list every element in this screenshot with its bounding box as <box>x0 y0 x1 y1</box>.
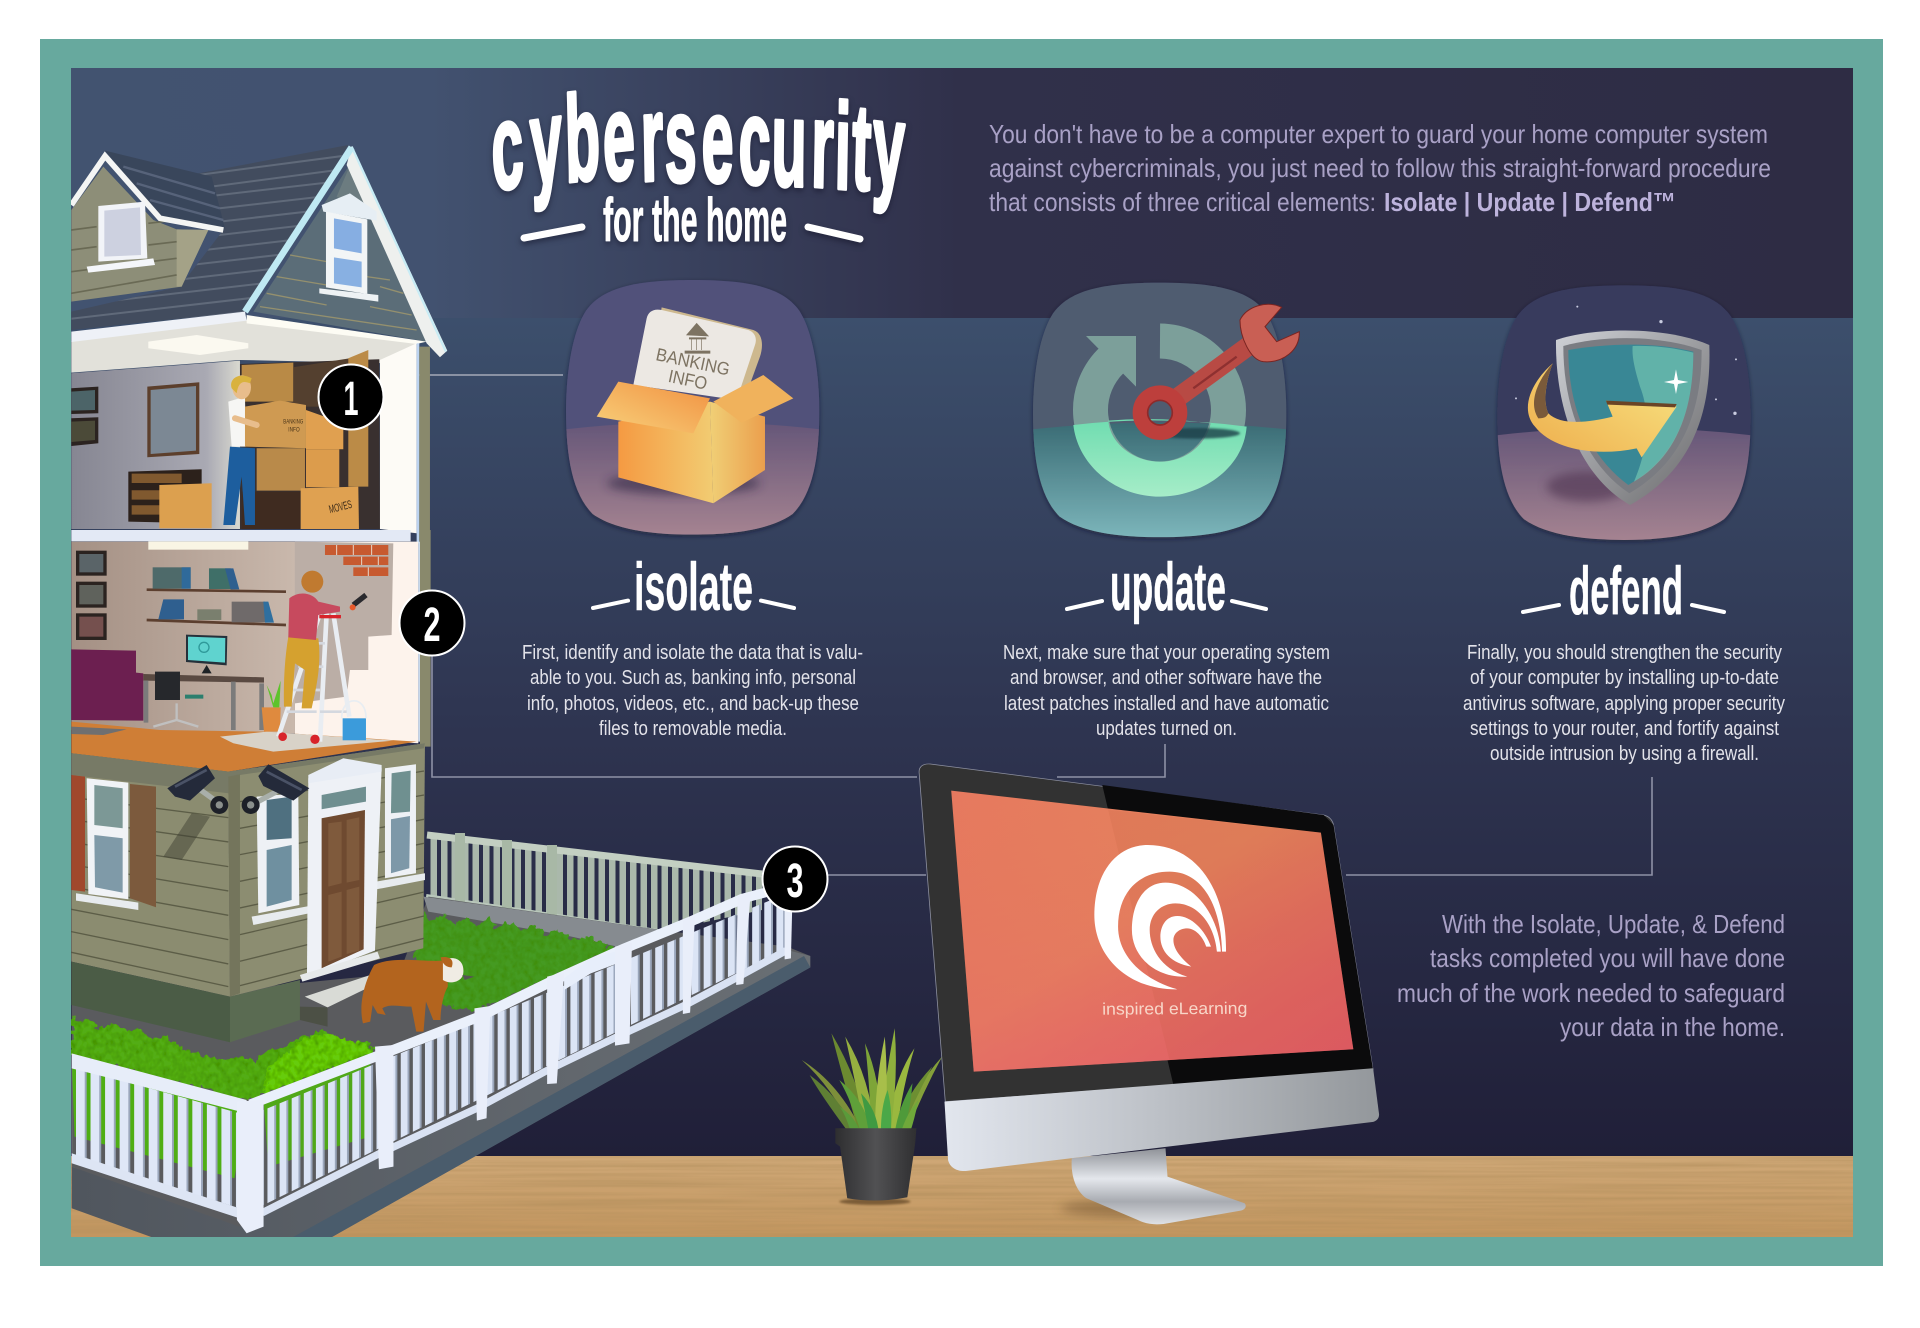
heading: defend <box>1569 553 1683 629</box>
description: Next, make sure that your operating system <box>1003 642 1330 664</box>
back fence <box>426 833 762 933</box>
potted plant <box>802 1028 942 1205</box>
description: outside intrusion by using a firewall. <box>1490 743 1759 765</box>
screen <box>951 791 1353 1072</box>
title: cybersecurity for the home: cybersecurity <box>489 69 906 218</box>
closing paragraph <box>1397 909 1785 1042</box>
description: settings to your router, and fortify against <box>1470 718 1779 740</box>
icon: banking info box <box>559 280 826 541</box>
box shadow <box>607 472 760 495</box>
description <box>1463 642 1785 765</box>
eaves and ceiling <box>71 312 427 373</box>
grass blades <box>802 1028 942 1133</box>
background: upper band <box>71 68 1853 318</box>
section: update <box>1003 549 1330 740</box>
iMac monitor <box>919 764 1379 1224</box>
description: antivirus software, applying proper security <box>1463 693 1785 715</box>
fence front left section <box>72 1053 247 1218</box>
intro paragraph: You don't have to be a computer expert to guard your home computer system <box>989 119 1768 149</box>
wrench shadow <box>1153 428 1240 439</box>
left lawn <box>72 1013 374 1100</box>
computer desk and chair <box>143 635 264 730</box>
upper floor: room one and roof <box>60 145 447 550</box>
stand <box>1061 1148 1246 1224</box>
fence right sections <box>251 887 787 1213</box>
step, dog and front fence <box>72 882 793 1233</box>
icon: update wrench <box>1026 283 1299 543</box>
dormer <box>71 151 225 302</box>
sofa <box>71 649 143 721</box>
frames and shelves <box>76 551 286 640</box>
description: info, photos, videos, etc., and back-up these <box>527 693 859 715</box>
wrench <box>1140 304 1299 433</box>
stars <box>1515 306 1737 415</box>
number badge 1: 1 <box>344 373 358 426</box>
ground floor windows and shutters <box>71 764 425 925</box>
exterior walls with siding <box>71 743 425 1042</box>
intro paragraph: Isolate | Update | Defend™ <box>1384 187 1676 217</box>
aluminium chin <box>944 1068 1379 1171</box>
number badge 3 <box>762 846 828 912</box>
wooden desk surface <box>71 1156 1853 1237</box>
interior right wall <box>380 343 430 550</box>
heading <box>593 549 794 625</box>
cardboard box <box>597 375 793 503</box>
description <box>522 642 863 740</box>
potted plant in room <box>262 681 281 732</box>
intro paragraph <box>989 119 1771 217</box>
description <box>1003 642 1330 740</box>
banking card <box>633 307 762 400</box>
front door <box>307 758 382 977</box>
badge background <box>1491 285 1757 546</box>
description: updates turned on. <box>1096 718 1237 740</box>
section: isolate <box>522 549 863 740</box>
closing paragraph: much of the work needed to safeguard <box>1397 978 1785 1008</box>
floor with drop cloth <box>71 722 417 772</box>
paint bucket <box>342 701 366 740</box>
gable end <box>245 146 447 357</box>
number badge 3: 3 <box>786 855 804 908</box>
wrap-around arrow <box>1528 363 1677 457</box>
yard slab and grass <box>72 897 810 1237</box>
heading: isolate <box>634 549 753 625</box>
shield shadow <box>1547 472 1627 502</box>
number badge 2: 2 <box>424 599 440 652</box>
description: files to removable media. <box>599 718 787 740</box>
right lawn <box>414 912 615 1011</box>
man carrying box: INFO <box>288 427 300 434</box>
plant pot <box>835 1128 916 1201</box>
heading <box>1067 549 1266 625</box>
number badge 1 <box>318 364 384 430</box>
refresh arrow ring <box>1073 336 1247 497</box>
description: latest patches installed and have automatic <box>1004 693 1329 715</box>
number badge 2 <box>400 590 464 656</box>
logo: inspired eLearning swirl <box>1094 845 1226 989</box>
banking card: BANKING <box>654 344 732 379</box>
description: of your computer by installing up-to-date <box>1470 667 1779 689</box>
closet with boxes <box>240 350 380 529</box>
security cameras <box>167 764 309 814</box>
heading: update <box>1110 549 1226 625</box>
room one walls <box>71 361 240 529</box>
closing paragraph: tasks completed you will have done <box>1430 943 1785 973</box>
icon: defend shield <box>1491 285 1757 546</box>
lower house: room two and exterior <box>71 530 431 1042</box>
badge background <box>559 280 826 541</box>
shield <box>1556 331 1710 505</box>
intro paragraph: that consists of three critical elements: <box>989 187 1376 217</box>
closet with boxes: MOVES <box>328 499 354 516</box>
intro paragraph: against cybercriminals, you just need to follow this straight-forward procedure <box>989 153 1771 183</box>
dog <box>361 957 474 1032</box>
title: cybersecurity for the home: for the home <box>603 186 787 254</box>
dark reflection on bezel <box>1102 785 1373 1085</box>
step and door sill <box>300 952 380 1027</box>
room two walls <box>71 530 431 747</box>
illustration: cutaway house with yard <box>60 145 810 1237</box>
bezel <box>919 764 1373 1102</box>
man carrying box: BANKING <box>283 418 303 425</box>
main roof <box>60 145 350 333</box>
description: Finally, you should strengthen the security <box>1467 642 1782 664</box>
background: lower band <box>71 318 1853 1156</box>
closing paragraph: With the Isolate, Update, & Defend <box>1442 909 1785 939</box>
connector lines <box>417 375 1652 875</box>
logo wordmark: inspired eLearning <box>1102 999 1247 1019</box>
description: able to you. Such as, banking info, personal <box>530 667 856 689</box>
banking card: INFO <box>666 366 709 394</box>
description: and browser, and other software have the <box>1010 667 1322 689</box>
dresser and box <box>128 469 212 528</box>
pot shadow <box>839 1198 910 1205</box>
description: First, identify and isolate the data that is valu- <box>522 642 863 664</box>
badge background <box>1026 283 1293 543</box>
section: defend <box>1463 553 1785 765</box>
woman on ladder painting <box>278 571 366 744</box>
man carrying box <box>223 375 306 525</box>
fence posts <box>237 882 793 1233</box>
heading <box>1523 553 1724 629</box>
wall pictures <box>71 382 199 457</box>
closing paragraph: your data in the home. <box>1560 1012 1785 1042</box>
